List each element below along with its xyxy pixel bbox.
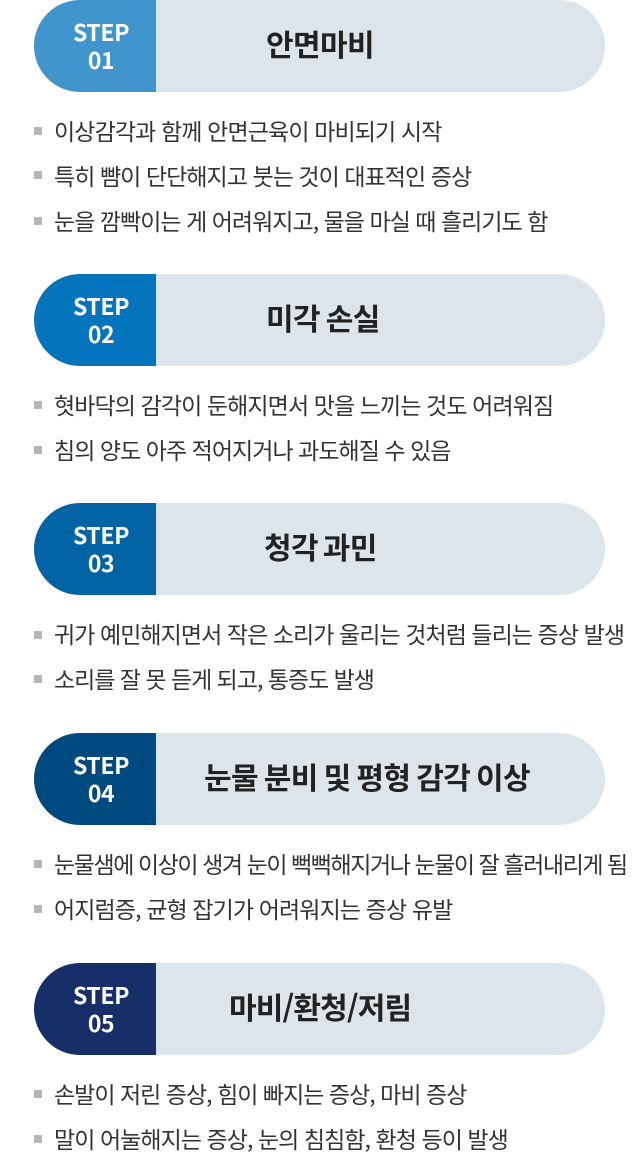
step 1 text line 1: 이상감각과 함께 안면근육이 마비되기 시작 <box>54 113 442 147</box>
step 5 header <box>34 963 605 1055</box>
step 3 text line 2: 소리를 잘 못 듣게 되고, 통증도 발생 <box>54 661 374 695</box>
step 5 title: 마비/환청/저림 <box>229 984 411 1028</box>
step 2 badge: 02 <box>88 316 114 350</box>
step 4 title: 눈물 분비 및 평형 감각 이상 <box>204 754 530 798</box>
step 3 bullet marker <box>34 675 42 683</box>
step 1 badge: 01 <box>88 42 114 76</box>
step 3 title: 청각 과민 <box>264 524 377 568</box>
step 4 badge: 04 <box>88 775 114 809</box>
step 4 badge <box>34 733 156 825</box>
step 2 badge <box>34 274 156 366</box>
step 4 bullet marker <box>34 860 42 868</box>
step 2 header <box>34 274 605 366</box>
step 1 bullet marker <box>34 127 42 135</box>
step 2 bullet marker <box>34 401 42 409</box>
step 4 bullet marker <box>34 905 42 913</box>
step 1 bullet marker <box>34 217 42 225</box>
step 1 title: 안면마비 <box>266 21 374 65</box>
step 4 badge: STEP <box>73 747 129 781</box>
step 5 badge: STEP <box>73 977 129 1011</box>
step 1 bullet marker <box>34 171 42 179</box>
step 4 header <box>34 733 605 825</box>
step 5 bullet marker <box>34 1135 42 1143</box>
step 3 badge <box>34 503 156 595</box>
step 1 badge: STEP <box>73 14 129 48</box>
step 5 text line 1: 손발이 저린 증상, 힘이 빠지는 증상, 마비 증상 <box>54 1076 466 1110</box>
step 3 badge: 03 <box>88 545 114 579</box>
step 3 header <box>34 503 605 595</box>
step 2 text line 1: 혓바닥의 감각이 둔해지면서 맛을 느끼는 것도 어려워짐 <box>54 387 553 421</box>
step 5 badge: 05 <box>88 1005 114 1039</box>
step 2 bullet marker <box>34 446 42 454</box>
step 5 bullet marker <box>34 1090 42 1098</box>
step 4 text line 2: 어지럼증, 균형 잡기가 어려워지는 증상 유발 <box>54 891 452 925</box>
step 4 text line 1: 눈물샘에 이상이 생겨 눈이 뻑뻑해지거나 눈물이 잘 흘러내리게 됨 <box>54 846 627 880</box>
step 2 text line 2: 침의 양도 아주 적어지거나 과도해질 수 있음 <box>54 432 450 466</box>
step 3 badge: STEP <box>73 517 129 551</box>
step 2 title: 미각 손실 <box>266 295 380 339</box>
step 1 header <box>34 0 605 92</box>
step 3 text line 1: 귀가 예민해지면서 작은 소리가 울리는 것처럼 들리는 증상 발생 <box>54 616 624 650</box>
step 3 bullet marker <box>34 631 42 639</box>
step 5 badge <box>34 963 156 1055</box>
step 1 text line 2: 특히 뺨이 단단해지고 붓는 것이 대표적인 증상 <box>54 158 471 192</box>
step 1 badge <box>34 0 156 92</box>
step 2 badge: STEP <box>73 288 129 322</box>
step 1 text line 3: 눈을 깜빡이는 게 어려워지고, 물을 마실 때 흘리기도 함 <box>54 203 547 237</box>
